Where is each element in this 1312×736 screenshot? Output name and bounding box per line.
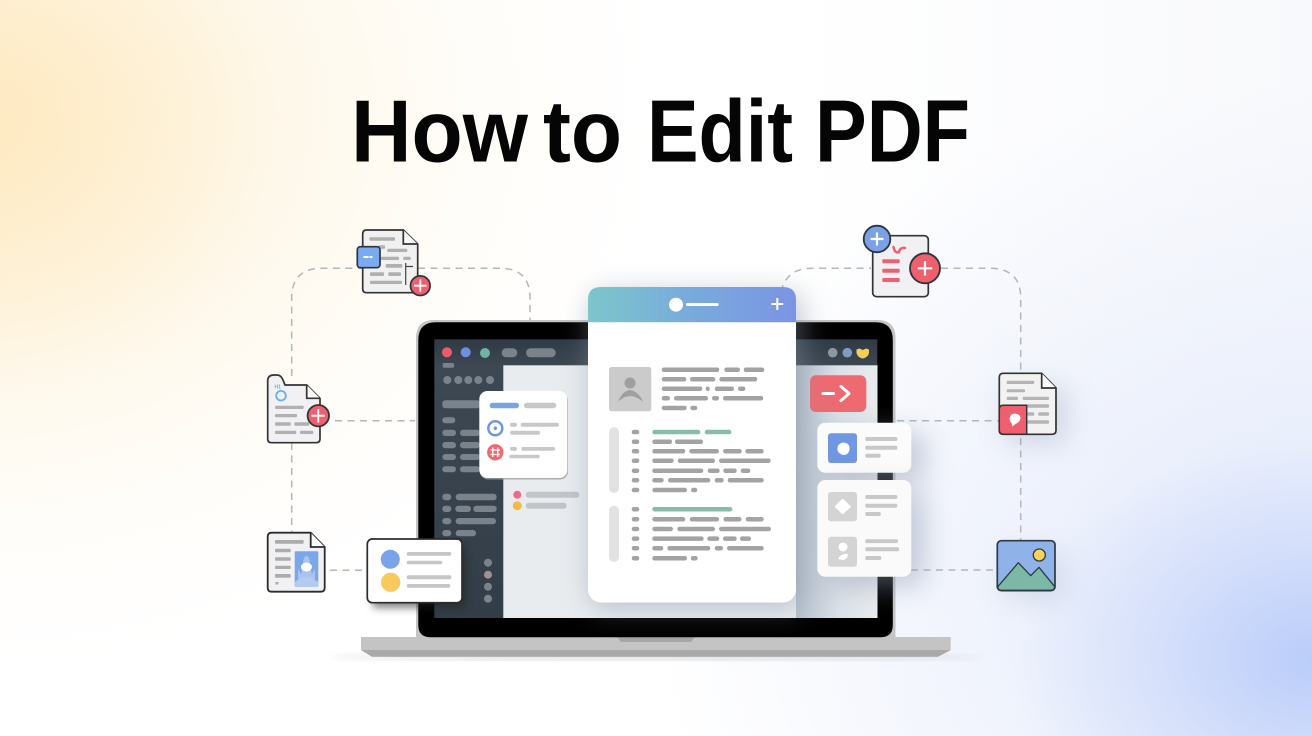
icon: image landscape bbox=[997, 541, 1064, 600]
panel: center document bbox=[588, 287, 802, 608]
document header bbox=[588, 287, 796, 322]
panel: bottom-left contact card bbox=[367, 539, 466, 608]
dashed connectors bbox=[292, 268, 1021, 570]
screen content area bbox=[503, 365, 878, 618]
title: PDF bbox=[815, 82, 970, 180]
title: How bbox=[351, 82, 529, 180]
top bar right icons bbox=[828, 348, 869, 358]
section two bbox=[609, 506, 771, 562]
laptop base bbox=[330, 637, 980, 660]
panel: floating popup bbox=[479, 391, 568, 480]
section one bbox=[609, 427, 771, 493]
icon: gray person tile bbox=[828, 537, 857, 567]
icon: document with red marks bbox=[864, 226, 940, 297]
summary text lines bbox=[662, 368, 764, 410]
laptop bezel bbox=[416, 320, 896, 637]
icon: blue tile bbox=[828, 433, 857, 463]
window controls bbox=[442, 347, 556, 358]
icon: document with portrait bbox=[268, 533, 325, 592]
content list bbox=[513, 491, 579, 510]
icon: target ring bbox=[488, 421, 502, 435]
icon: gray diamond tile bbox=[828, 492, 857, 521]
screen top bar bbox=[434, 339, 877, 365]
icon: folder document with plus badge bbox=[268, 375, 329, 443]
panel: right upper card bbox=[817, 423, 924, 482]
panel: right lower card bbox=[817, 480, 924, 586]
icon: document with comment badge bbox=[999, 373, 1066, 443]
document shadow on screen bbox=[796, 365, 878, 618]
red arrow button bbox=[810, 375, 866, 412]
icon: document with minus and plus badges bbox=[357, 230, 430, 296]
screen sidebar bbox=[434, 363, 503, 618]
icon: folder document with plus badge: H1 bbox=[274, 384, 281, 390]
title: Edit bbox=[647, 82, 793, 180]
avatar placeholder bbox=[609, 367, 651, 411]
title: to bbox=[543, 82, 622, 180]
laptop bbox=[330, 320, 980, 660]
icon: hash badge bbox=[487, 444, 503, 460]
